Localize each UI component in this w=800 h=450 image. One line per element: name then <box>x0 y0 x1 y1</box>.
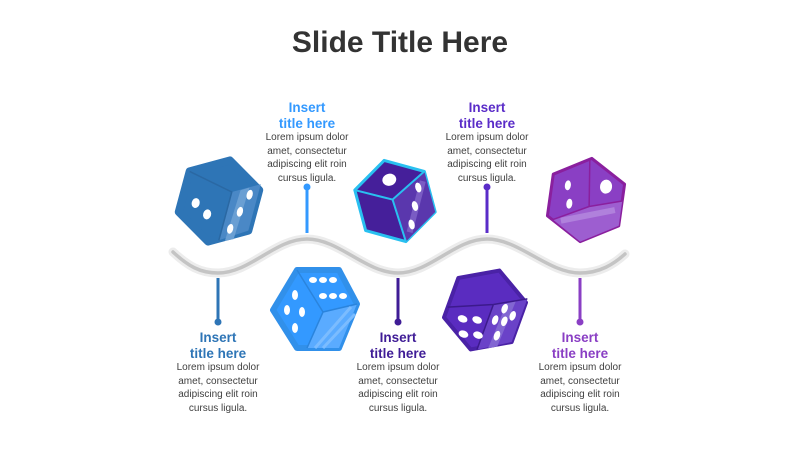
text block 5: amet, consectetur <box>540 376 620 386</box>
die 4 <box>437 258 533 362</box>
text block 2: Insert <box>289 100 325 115</box>
text block 2: cursus ligula. <box>278 172 336 184</box>
text block 4 <box>446 100 528 184</box>
text block 2 <box>266 100 348 184</box>
text block 4: amet, consectetur <box>447 146 527 156</box>
connector 2 <box>304 184 310 233</box>
text block 1: title here <box>190 346 246 360</box>
text block 4: Lorem ipsum dolor <box>446 132 528 143</box>
die 1 <box>173 151 265 251</box>
text block 5: adipiscing elit roin <box>540 389 620 400</box>
text block 1: Lorem ipsum dolor <box>177 362 259 373</box>
text block 3: Insert <box>380 330 416 345</box>
text block 3: amet, consectetur <box>358 376 438 386</box>
text block 5 <box>539 330 622 414</box>
text block 3 <box>357 330 440 414</box>
text block 3: Lorem ipsum dolor <box>357 362 439 373</box>
die 3 <box>349 151 441 251</box>
die 5 <box>545 153 627 247</box>
title: Slide Title Here <box>292 26 508 59</box>
text block 4: title here <box>459 116 515 130</box>
text block 2: title here <box>279 116 335 130</box>
text block 2: amet, consectetur <box>267 146 347 156</box>
text block 4: Insert <box>469 100 505 115</box>
text block 5: cursus ligula. <box>551 402 609 414</box>
text block 4: cursus ligula. <box>458 172 516 184</box>
text block 2: Lorem ipsum dolor <box>266 132 348 143</box>
text block 1: Insert <box>200 330 236 345</box>
die 2 <box>273 270 357 348</box>
text block 3: adipiscing elit roin <box>358 389 438 400</box>
text block 1: amet, consectetur <box>178 376 258 386</box>
text block 4: adipiscing elit roin <box>447 159 527 170</box>
text block 1: adipiscing elit roin <box>178 389 258 400</box>
text block 1: cursus ligula. <box>189 402 247 414</box>
text block 3: title here <box>370 346 426 360</box>
connector 4 <box>484 184 490 233</box>
text block 5: Lorem ipsum dolor <box>539 362 621 373</box>
connector 3 <box>394 278 402 326</box>
connector 1 <box>214 278 222 326</box>
text block 3: cursus ligula. <box>369 402 427 414</box>
wave line <box>173 239 625 273</box>
text block 5: Insert <box>562 330 598 345</box>
connector 5 <box>576 278 584 326</box>
text block 5: title here <box>552 346 608 360</box>
text block 1 <box>177 330 260 414</box>
text block 2: adipiscing elit roin <box>267 159 347 170</box>
